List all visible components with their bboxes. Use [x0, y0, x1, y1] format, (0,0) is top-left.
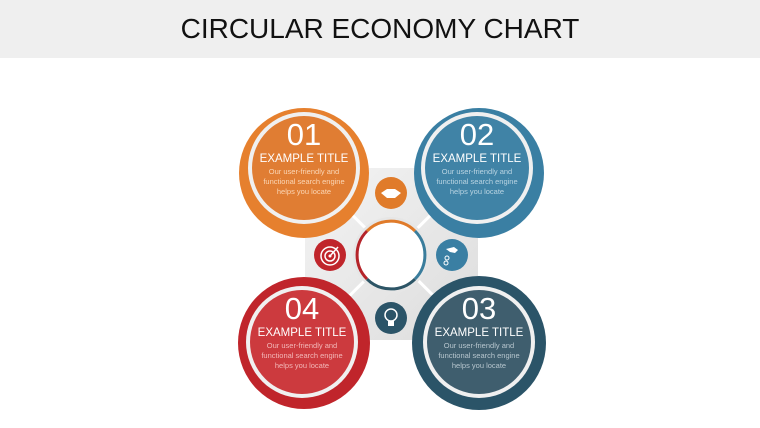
circle 03: Our user-friendly and [444, 341, 514, 350]
icon: faucet [436, 239, 468, 271]
circle 03 [412, 276, 546, 410]
circle 04: helps you locate [275, 361, 329, 370]
circle 04 [238, 277, 370, 409]
title bar: CIRCULAR ECONOMY CHART [181, 13, 579, 44]
circle 01 [239, 108, 369, 238]
circle 02: Our user-friendly and [442, 167, 512, 176]
circle 02: 02 [460, 117, 494, 152]
circle 04: Our user-friendly and [267, 341, 337, 350]
circle 04: EXAMPLE TITLE [258, 327, 347, 339]
circle 03: 03 [462, 291, 496, 326]
circle 02: helps you locate [450, 187, 504, 196]
icon: light bulb [375, 302, 407, 334]
circle 03: helps you locate [452, 361, 506, 370]
icon: target [314, 239, 346, 271]
circle 04: 04 [285, 291, 319, 326]
center ring [353, 217, 429, 293]
center square panel [305, 168, 478, 340]
circle 01: Our user-friendly and [269, 167, 339, 176]
title bar [0, 0, 760, 58]
circle 04: functional search engine [261, 351, 343, 360]
circle 02 [414, 108, 544, 238]
icon: handshake [375, 177, 407, 209]
circle 02: EXAMPLE TITLE [433, 153, 522, 165]
circle 01: helps you locate [277, 187, 331, 196]
circle 01: EXAMPLE TITLE [260, 153, 349, 165]
circle 01: 01 [287, 117, 321, 152]
circle 03: EXAMPLE TITLE [435, 327, 524, 339]
circle 03: functional search engine [438, 351, 520, 360]
circle 02: functional search engine [436, 177, 518, 186]
circle 01: functional search engine [263, 177, 345, 186]
